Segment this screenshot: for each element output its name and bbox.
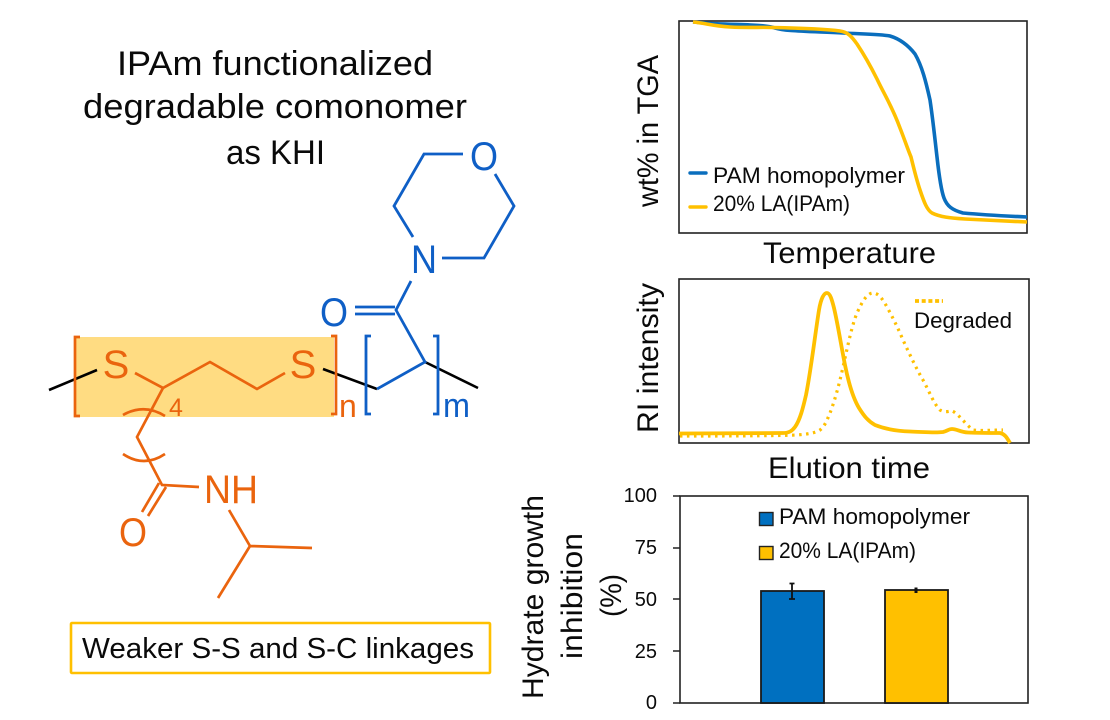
chart: GPC bbox=[632, 279, 1029, 485]
x axis label: Elution time bbox=[768, 452, 930, 485]
orange LA(IPAm) unit bbox=[75, 336, 357, 598]
curve: degraded bbox=[680, 293, 1003, 436]
error bars bbox=[789, 583, 795, 599]
blue morpholine acrylamide unit: m bbox=[443, 387, 470, 425]
blue morpholine acrylamide unit bbox=[320, 135, 514, 425]
plot frame bbox=[680, 496, 1028, 703]
legend: 20% LA(IPAm) bbox=[779, 538, 916, 563]
y axis title: inhibition bbox=[556, 533, 589, 659]
y axis title: (%) bbox=[595, 574, 628, 617]
title: degradable comonomer bbox=[83, 88, 467, 126]
backbone end bonds bbox=[49, 362, 478, 390]
y axis label: wt% in TGA bbox=[632, 55, 665, 208]
orange LA(IPAm) unit: n bbox=[339, 388, 357, 424]
chart: hydrate growth inhibition bbox=[517, 485, 1028, 714]
tick labels: 75 bbox=[635, 537, 657, 559]
y axis title: Hydrate growth bbox=[517, 495, 550, 699]
y axis title bbox=[517, 495, 628, 699]
tick labels: 50 bbox=[635, 589, 657, 611]
callout: weaker linkages bbox=[71, 623, 490, 673]
title: as KHI bbox=[226, 134, 325, 172]
bar: 20% LA(IPAm) bbox=[885, 590, 948, 703]
legend: degraded: Degraded bbox=[914, 308, 1012, 333]
callout: weaker linkages: Weaker S-S and S-C linkages bbox=[82, 633, 474, 665]
title bbox=[83, 45, 467, 172]
blue morpholine acrylamide unit: O bbox=[320, 291, 348, 335]
orange LA(IPAm) unit: S bbox=[103, 343, 129, 387]
orange LA(IPAm) unit: 4 bbox=[169, 394, 183, 422]
curve: original bbox=[679, 293, 1010, 443]
legend: 20% LA(IPAm) bbox=[713, 191, 850, 216]
axis ticks bbox=[673, 496, 680, 703]
title: IPAm functionalized bbox=[117, 45, 433, 83]
legend: PAM homopolymer bbox=[779, 504, 970, 529]
bar: PAM homopolymer bbox=[761, 591, 824, 703]
tick labels: 100 bbox=[624, 485, 657, 507]
tick labels: 0 bbox=[646, 692, 657, 714]
legend: PAM homopolymer bbox=[713, 163, 905, 188]
legend bbox=[760, 504, 970, 563]
highlight: degradable unit bbox=[75, 337, 334, 417]
blue morpholine acrylamide unit: O bbox=[470, 135, 498, 179]
legend bbox=[690, 163, 905, 216]
orange LA(IPAm) unit: S bbox=[290, 343, 316, 387]
tick labels bbox=[624, 485, 657, 714]
orange LA(IPAm) unit: O bbox=[119, 511, 147, 555]
curve: 20% LA(IPAm) bbox=[693, 22, 1027, 222]
y axis label: RI intensity bbox=[632, 283, 665, 433]
chart: TGA bbox=[632, 21, 1027, 270]
orange LA(IPAm) unit: NH bbox=[204, 468, 258, 512]
curve: PAM homopolymer bbox=[693, 22, 1027, 217]
tick labels: 25 bbox=[635, 641, 657, 663]
blue morpholine acrylamide unit: N bbox=[411, 238, 437, 282]
chemical structure bbox=[49, 135, 514, 598]
x axis label: Temperature bbox=[763, 237, 936, 270]
